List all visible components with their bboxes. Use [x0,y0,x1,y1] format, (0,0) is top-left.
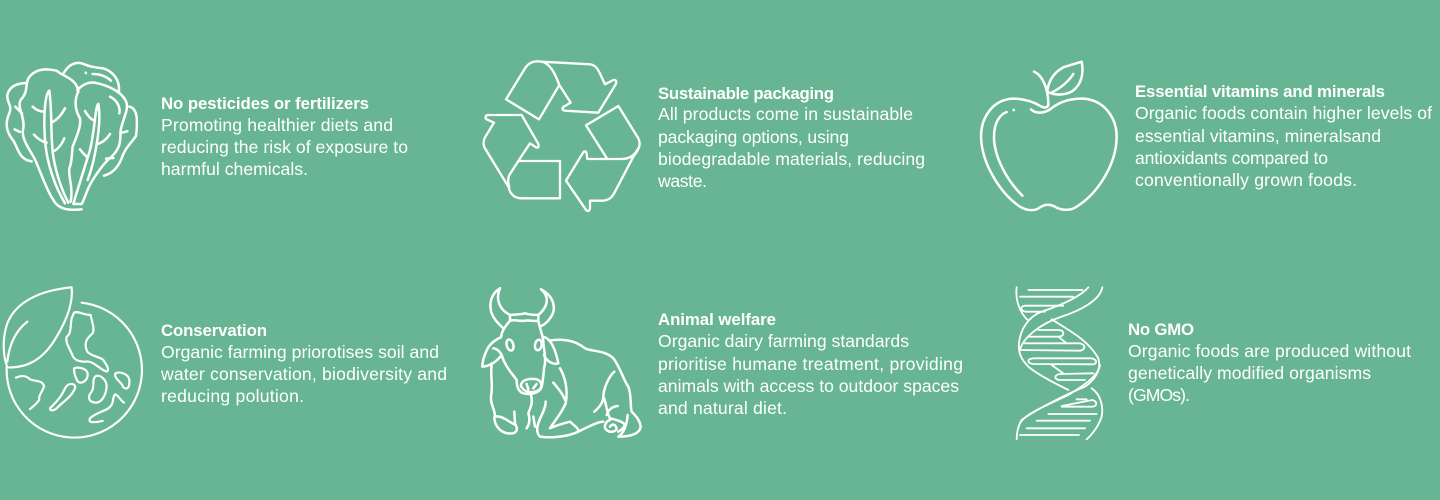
text block: (GMOs). [1128,385,1190,405]
text block: biodegradable materials, reducing [658,149,925,169]
heading: Sustainable packaging [658,84,834,103]
text block [1135,103,1432,190]
icon: lettuce [7,63,137,210]
panel: no GMO [1016,287,1411,439]
heading: Essential vitamins and minerals [1135,82,1385,101]
icon: DNA helix [1016,287,1102,439]
icon: globe with leaf [4,287,142,438]
text block: reducing polution. [161,386,304,406]
text block: All products come in sustainable [658,104,913,124]
text block: Organic foods are produced without [1128,341,1411,361]
text block: reducing the risk of exposure to [161,137,408,157]
text block: Promoting healthier diets and [161,115,393,135]
icon: cow [482,288,641,437]
text block: and natural diet. [658,398,787,418]
text block: animals with access to outdoor spaces [658,376,959,396]
text block [1128,341,1411,405]
text block: prioritise humane treatment, providing [658,354,963,374]
panel: sustainable packaging [484,61,925,211]
text block [658,331,963,418]
text block [657,104,925,191]
text block [161,115,408,179]
heading: Conservation [161,321,267,340]
text block: antioxidants compared to [1135,148,1328,168]
panel: vitamins and minerals [981,62,1432,210]
text block: Organic dairy farming standards [658,331,909,351]
text block: essential vitamins, mineralsand [1135,126,1381,146]
heading: No pesticides or fertilizers [161,94,369,113]
heading: Animal welfare [658,310,776,329]
text block [160,342,447,406]
heading: No GMO [1128,320,1194,339]
text block: genetically modified organisms [1128,363,1371,383]
panel: no pesticides [7,63,408,210]
text block: Organic farming priorotises soil and [161,342,439,362]
text block: water conservation, biodiversity and [160,364,447,384]
text block: Organic foods contain higher levels of [1135,103,1432,123]
panel: animal welfare [482,288,963,437]
text block: harmful chemicals. [161,159,308,179]
text block: conventionally grown foods. [1135,170,1357,190]
text block: packaging options, using [658,127,849,147]
text block: waste. [657,171,707,191]
icon: apple [981,62,1117,210]
panel: conservation [4,287,447,438]
icon: recycling arrows [484,61,640,211]
